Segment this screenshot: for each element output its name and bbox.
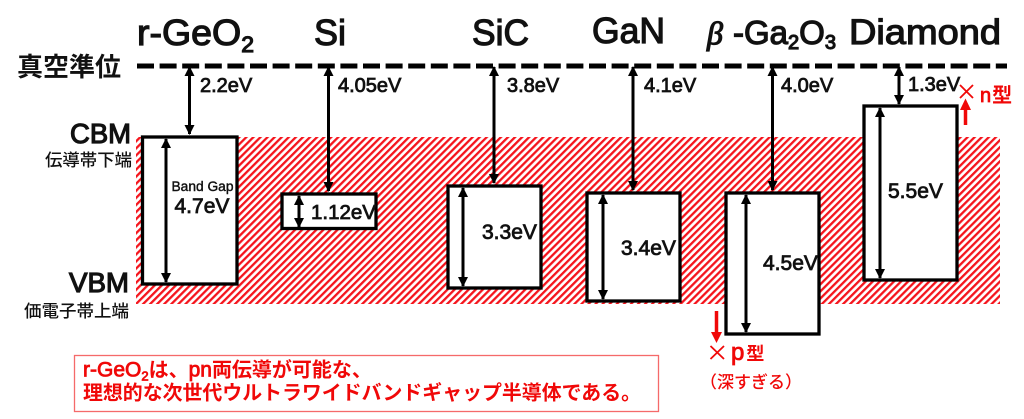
column: beta-Ga2O3 [706, 14, 836, 334]
callout: n-type not possible: n型 [980, 79, 1012, 108]
column: GaN: GaN [592, 10, 665, 51]
label: CBM [45, 118, 132, 171]
column: beta-Ga2O3: -Ga [733, 14, 788, 51]
column: beta-Ga2O3: 3 [825, 32, 836, 54]
callout: p-type not possible: p型 [731, 339, 764, 366]
conclusion box: r-GeO [83, 358, 141, 382]
conclusion box [74, 354, 658, 412]
callout: p-type not possible: （深すぎる） [700, 368, 802, 393]
label: CBM: CBM [70, 118, 131, 149]
label: VBM [24, 267, 129, 322]
column: Diamond: 1.3eV [908, 74, 961, 96]
label: VBM: 価電子帯上端 [24, 297, 129, 322]
column: r-GeO2: 4.7eV [174, 195, 229, 218]
column: Si: 4.05eV [338, 75, 402, 97]
vacuum level dashed line [137, 64, 1007, 68]
callout: n-type not possible [960, 79, 1012, 125]
heading: vacuum level: 真空準位 [17, 47, 121, 84]
column: Diamond: Diamond [849, 13, 1001, 52]
hatched band: usable CBM to VBM range [136, 137, 1000, 304]
column: SiC: SiC [472, 12, 529, 53]
label: CBM: 伝導帯下端 [45, 146, 132, 171]
column: GaN [587, 10, 697, 301]
column: SiC [448, 12, 560, 288]
column: beta-Ga2O3: 2 [788, 32, 799, 54]
label: VBM: VBM [69, 267, 129, 298]
column: GaN: 4.1eV [644, 75, 697, 97]
column: GaN: 3.4eV [621, 237, 676, 260]
callout: p-type not possible [700, 311, 802, 393]
column: Diamond [849, 13, 1001, 280]
column: r-GeO2: 2.2eV [200, 75, 253, 97]
column: SiC: 3.8eV [507, 75, 560, 97]
conclusion box: pn両伝導が可能な、 [189, 354, 372, 382]
column: Si [282, 12, 402, 228]
column: r-GeO2: 2 [241, 32, 254, 57]
column: beta-Ga2O3: O [799, 14, 825, 51]
column: Si: Si [314, 12, 346, 53]
column: beta-Ga2O3: 4.0eV [781, 75, 834, 97]
column: beta-Ga2O3: 4.5eV [763, 252, 818, 275]
column: beta-Ga2O3: β [706, 15, 723, 51]
conclusion box: 2 [141, 368, 149, 384]
column: Si: 1.12eV [311, 201, 376, 224]
conclusion box: は、 [149, 354, 189, 382]
conclusion box: 理想的な次世代ウルトラワイドバンドギャップ半導体である。 [83, 376, 641, 406]
column: r-GeO2: Band Gap [172, 179, 234, 194]
column: r-GeO2 [137, 12, 254, 284]
column: SiC: 3.3eV [482, 221, 537, 244]
column: r-GeO2: r-GeO [137, 12, 237, 53]
column: Diamond: 5.5eV [888, 180, 943, 203]
